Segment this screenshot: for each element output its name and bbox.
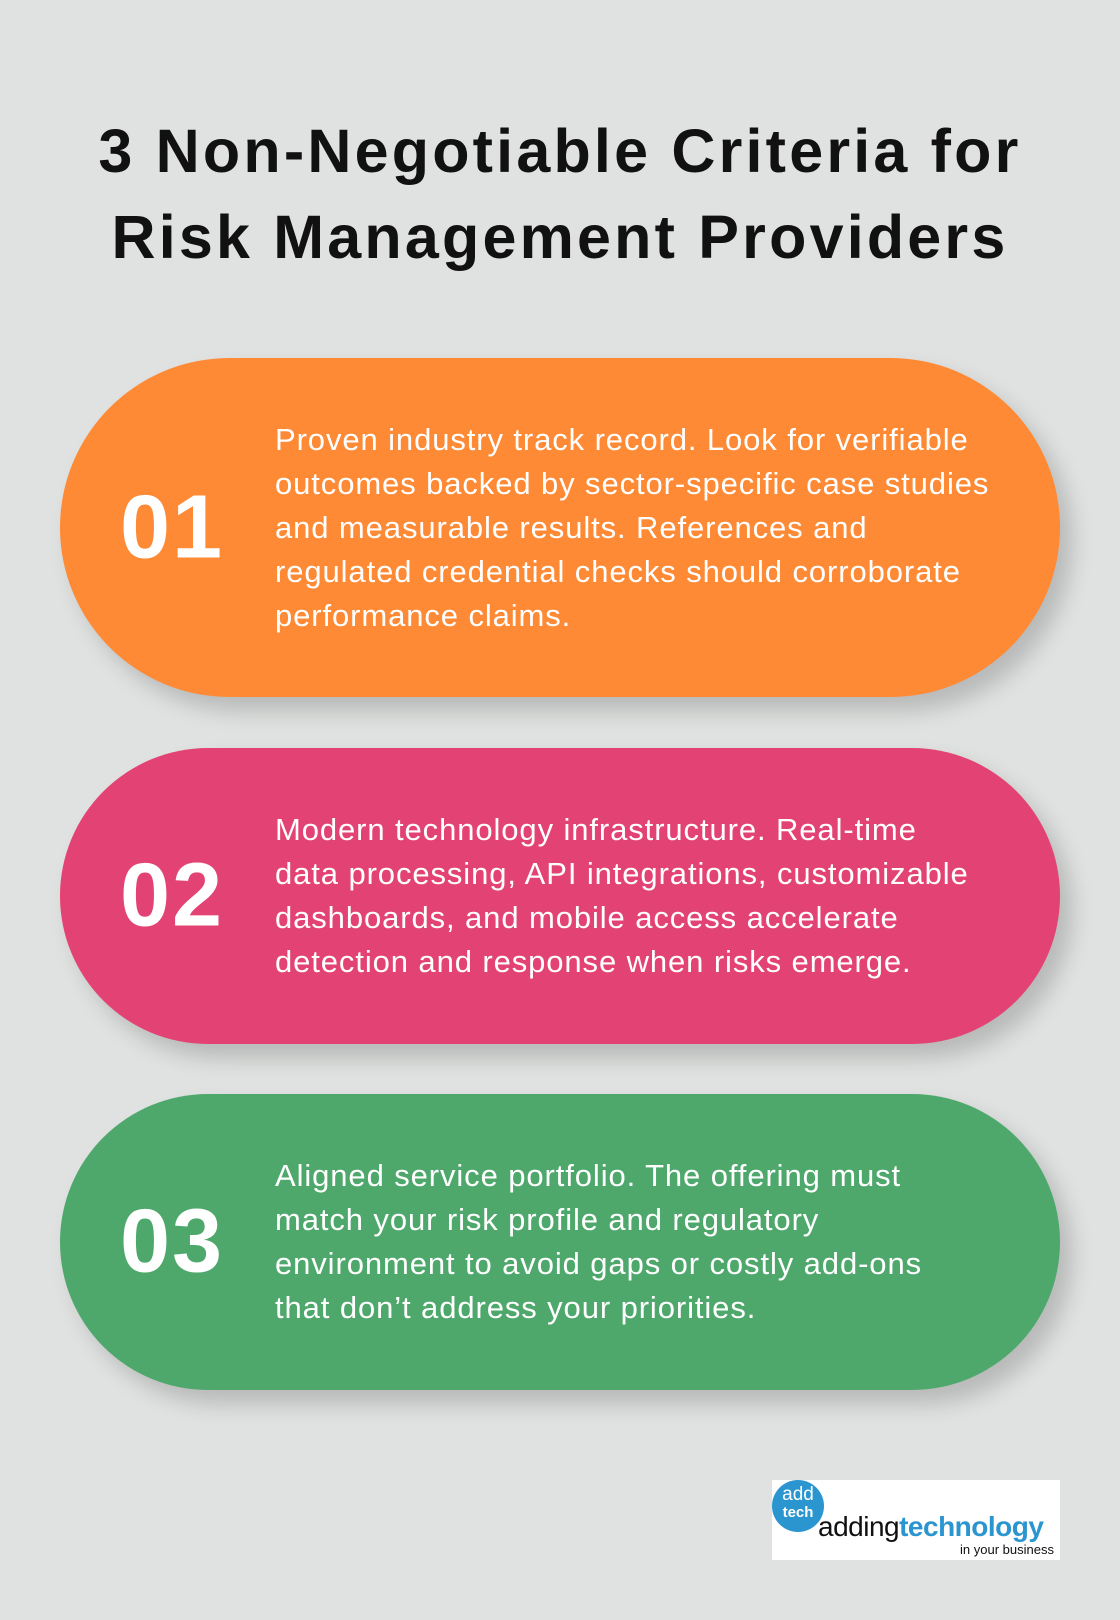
- text 03: environment to avoid gaps or costly add-ons: [275, 1246, 922, 1281]
- text 02: Modern technology infrastructure. Real-time: [275, 812, 917, 847]
- logo wordmark: addingtechnology: [818, 1511, 1043, 1542]
- title: Risk Management Providers: [111, 203, 1008, 271]
- logo: [772, 1480, 1060, 1560]
- logo circle: [772, 1480, 824, 1532]
- title: [98, 117, 1022, 271]
- panel: criterion 01: [60, 358, 1060, 697]
- text 01: outcomes backed by sector-specific case studies: [275, 466, 989, 500]
- text 03: [275, 1158, 922, 1325]
- text 03: that don’t address your priorities.: [275, 1290, 756, 1325]
- panel: criterion 02: [60, 748, 1060, 1044]
- text 01: regulated credential checks should corroborate: [275, 554, 961, 588]
- text 01: [275, 422, 989, 632]
- logo circle: tech: [783, 1504, 813, 1521]
- text 03: Aligned service portfolio. The offering must: [275, 1158, 901, 1193]
- number 03: 03: [120, 1192, 224, 1292]
- logo tagline: in your business: [960, 1542, 1054, 1557]
- logo circle: add: [782, 1484, 814, 1505]
- text 01: Proven industry track record. Look for verifiable: [275, 422, 969, 456]
- number 01: 01: [120, 477, 224, 577]
- text 01: and measurable results. References and: [275, 510, 868, 544]
- number 02: 02: [120, 846, 224, 946]
- title: 3 Non-Negotiable Criteria for: [98, 117, 1022, 185]
- text 01: performance claims.: [275, 598, 571, 632]
- text 02: [275, 812, 969, 979]
- text 02: detection and response when risks emerge.: [275, 944, 912, 979]
- panel: criterion 03: [60, 1094, 1060, 1390]
- text 02: data processing, API integrations, customizable: [275, 856, 969, 891]
- text 03: match your risk profile and regulatory: [275, 1202, 819, 1237]
- text 02: dashboards, and mobile access accelerate: [275, 900, 899, 935]
